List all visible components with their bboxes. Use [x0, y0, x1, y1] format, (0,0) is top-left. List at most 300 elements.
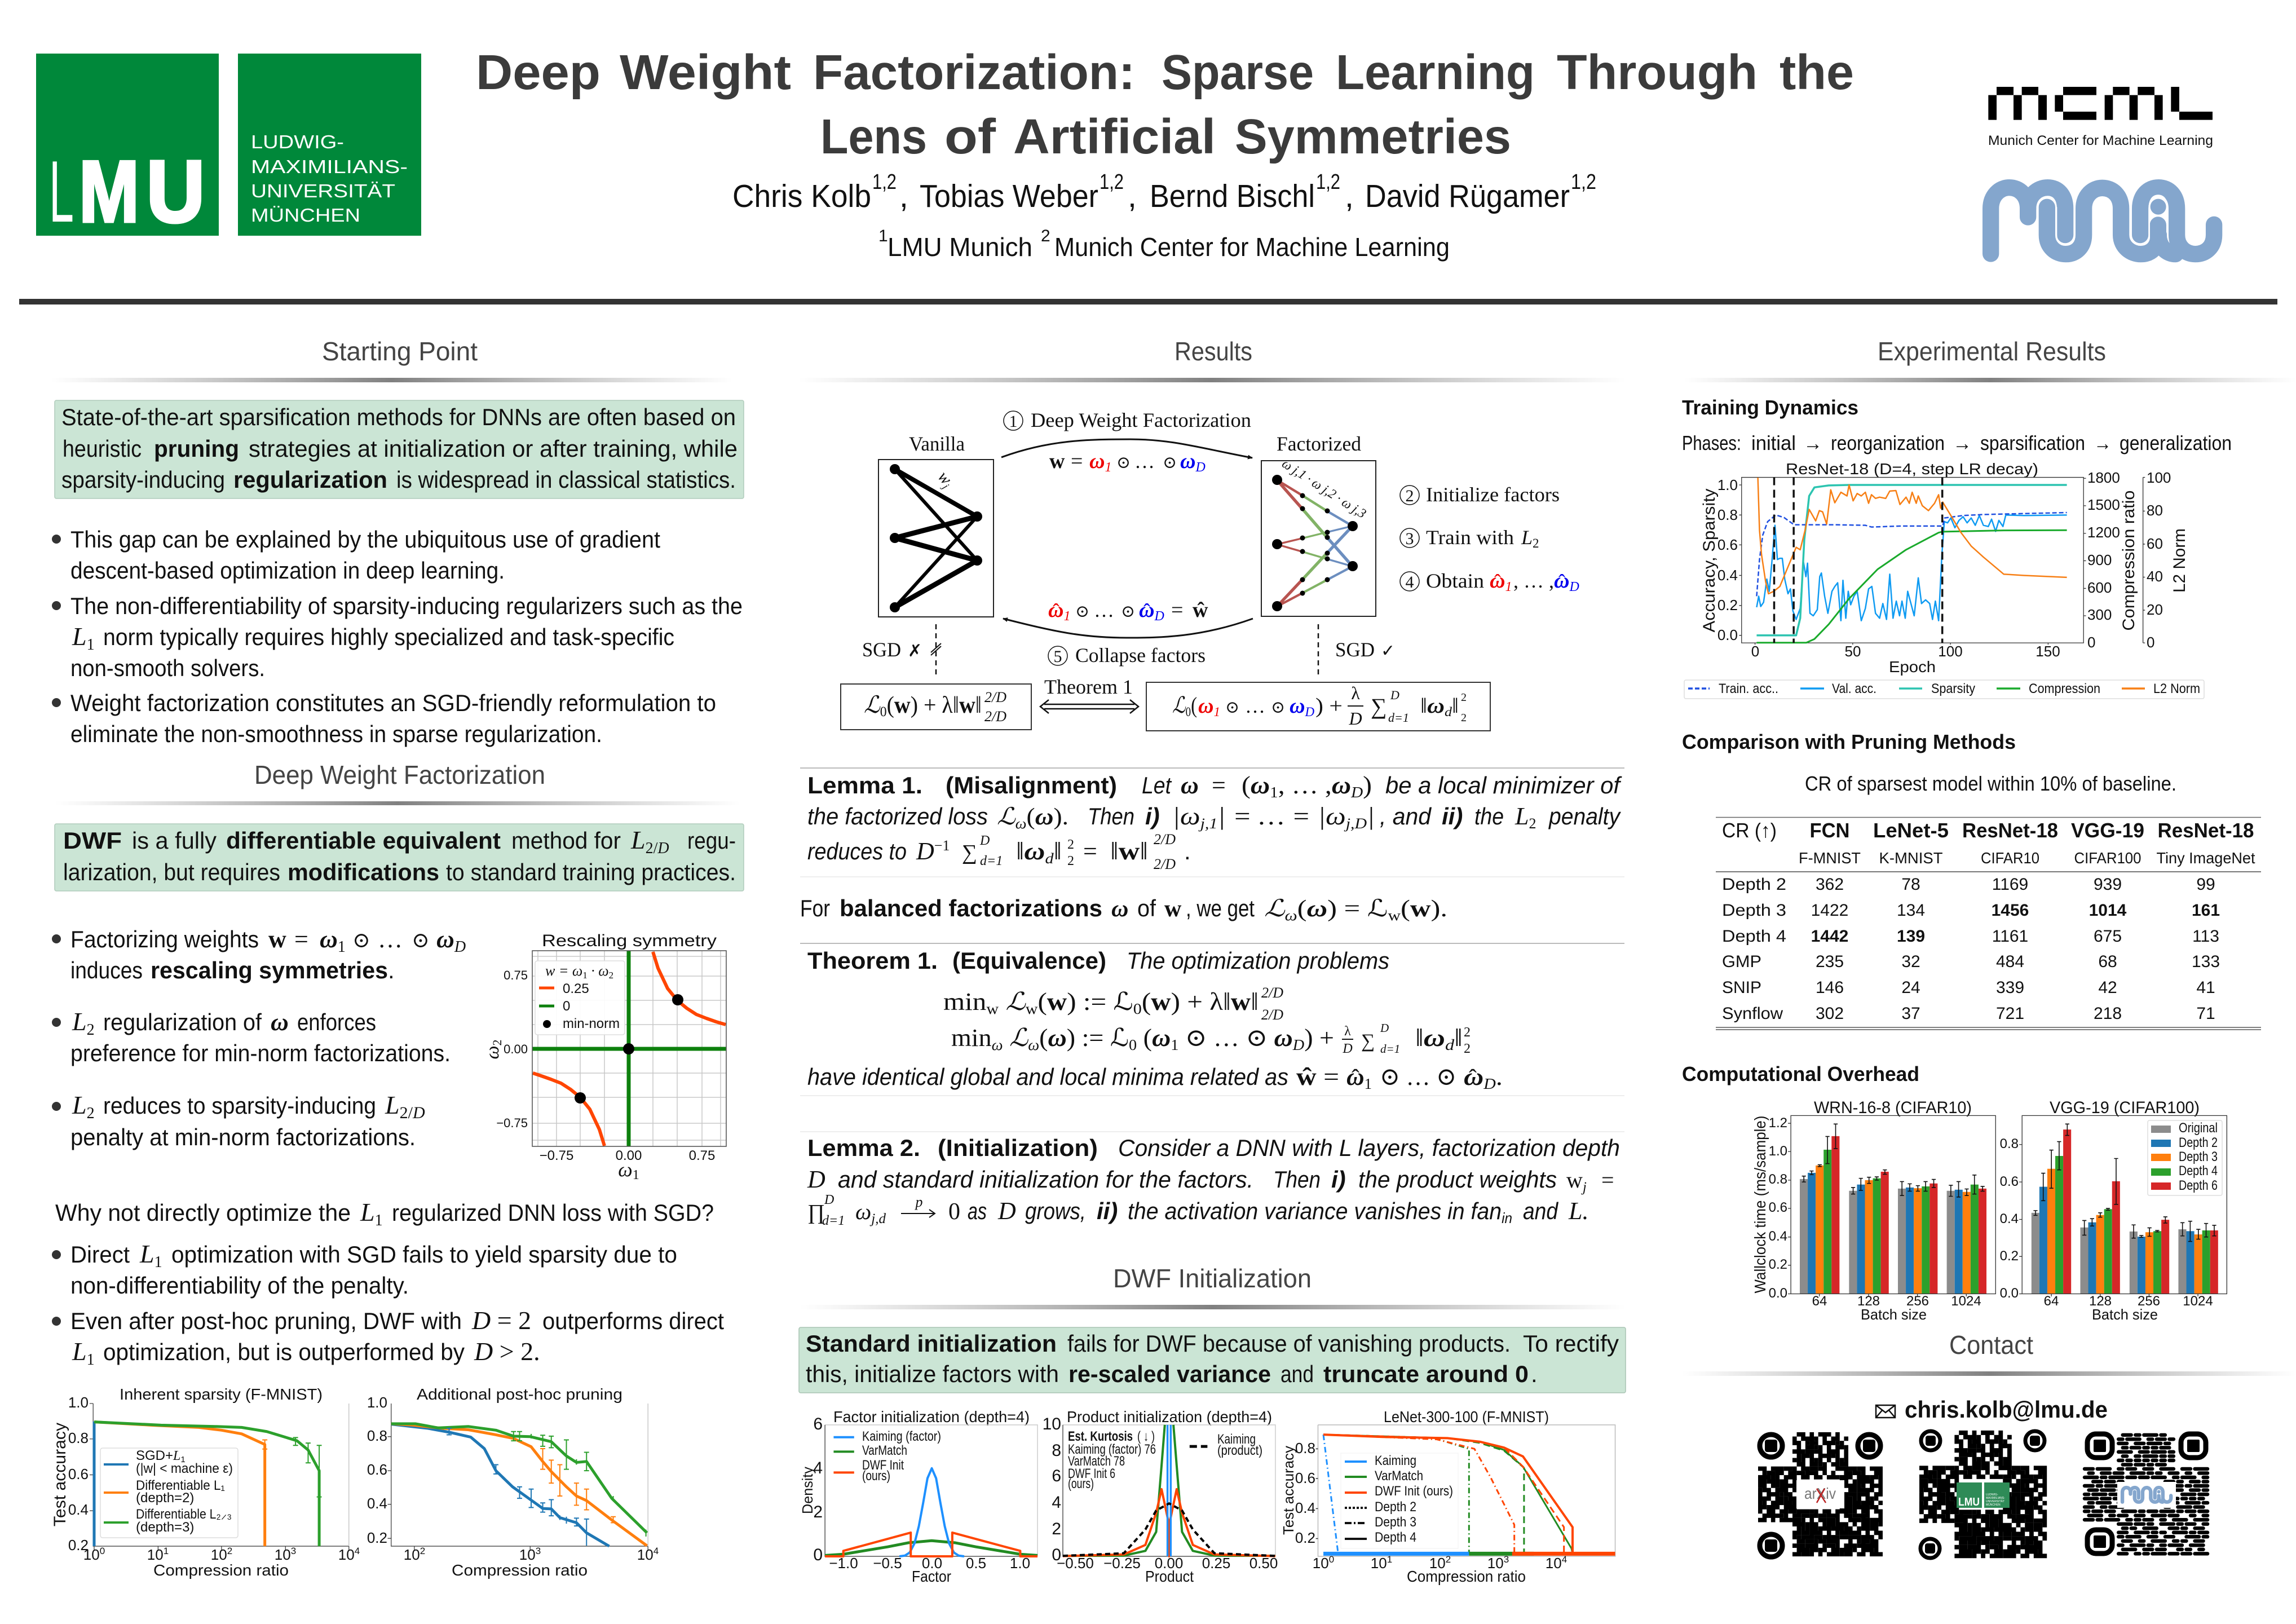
theorem 1: ( [1037, 988, 1047, 1016]
text block: balanced factorizations: ω [1284, 907, 1297, 924]
chart: VGG-19 bars: 128 [2089, 1294, 2112, 1309]
formula: collapse: … [1094, 599, 1114, 621]
lemma 1: ω [1015, 815, 1027, 832]
lemma 2: Lemma 2. [807, 1135, 920, 1161]
lemma 1: . [1184, 838, 1191, 864]
chart: additional post-hoc pruning: 0.8 [367, 1427, 387, 1444]
lemma 1: | = … = |ω [1217, 802, 1346, 830]
table: pruning comparison: CR (↑) [1722, 819, 1777, 842]
chart: training dynamics: 0.0 [1717, 626, 1738, 643]
theorem 1: 2/D [1261, 1007, 1283, 1023]
theorem 1: ⊙ … ⊙ [1380, 1063, 1456, 1091]
text: phases: sparsification [1980, 431, 2085, 454]
steps 2 to 4: D [1569, 580, 1579, 594]
lemma 1: ω [1332, 771, 1351, 799]
theorem 1: . [1496, 1063, 1503, 1091]
formula: factorization: w [1049, 449, 1065, 473]
text block: DWF bullets [52, 925, 466, 1150]
chart: additional post-hoc pruning: 0.4 [367, 1495, 387, 1512]
text block: DWF bullets: regularization of [103, 1009, 262, 1035]
callout: standard initialization: truncate around 0 [1323, 1361, 1529, 1387]
legend: Depth 3 [1375, 1515, 1416, 1530]
lemma 1: 2 [1067, 837, 1074, 852]
theorem 1: 1 [1171, 1036, 1178, 1053]
subheading: Comparison: Comparison with Pruning Methods [1682, 730, 2016, 753]
text block: why not L1: 1 [375, 1212, 383, 1229]
formula: factorization: … [1134, 450, 1155, 473]
authors: , [899, 178, 908, 214]
chart: WRN-16-8 bars: WRN-16-8 (CIFAR10) [1814, 1098, 1972, 1117]
SGD cross: SGD [862, 638, 901, 661]
lemma 1: be a local minimizer of [1385, 772, 1622, 798]
table: pruning comparison: 113 [2192, 927, 2219, 946]
chart: rescaling symmetry: 0.00 [616, 1148, 642, 1163]
callout: state of the art [55, 400, 744, 498]
lemma 1: j,1 [1198, 815, 1217, 832]
text block: balanced factorizations [800, 895, 1447, 924]
text block: why not L1 [55, 1198, 714, 1229]
chart: WRN-16-8 bars: 0.4 [1769, 1229, 1787, 1244]
chart: rescaling symmetry: 0.75 [504, 968, 528, 982]
vanilla network: w [934, 467, 956, 488]
chart: training dynamics: 600 [2087, 579, 2112, 596]
callout: standard initialization: Standard initialization [806, 1330, 1057, 1357]
lemma 2: j [1581, 1180, 1587, 1195]
legend: Depth 4 [2179, 1163, 2218, 1179]
theorem 1: 2/D [1261, 985, 1283, 1001]
chart: additional post-hoc pruning: 4 [654, 1546, 659, 1556]
table: pruning comparison: SNIP [1722, 978, 1761, 997]
chart: product initialization: 2 [1052, 1520, 1061, 1538]
theorem 1: d [1445, 1036, 1455, 1053]
chart: training dynamics: 60 [2147, 535, 2163, 552]
chart: inherent sparsity: 10 [338, 1546, 355, 1563]
table: pruning comparison: 161 [2192, 901, 2220, 920]
chart: training dynamics: 100 [1938, 643, 1963, 660]
steps 2 to 4 [1400, 483, 1579, 594]
callout: DWF [55, 824, 744, 891]
chart: training dynamics: 50 [1845, 643, 1861, 660]
QR code: LMU: MAXIMILIANS- [1986, 1497, 2005, 1500]
steps 2 to 4: ˆ [1494, 570, 1501, 593]
table: pruning comparison: 1442 [1811, 927, 1848, 946]
legend: Depth 2 [1375, 1499, 1416, 1515]
lemma 1: = [1212, 771, 1226, 799]
text block: intro bullets: This gap can be explained by the ubiquitous use of gradient [70, 526, 660, 553]
chart: training dynamics: 0 [2087, 634, 2095, 651]
legend: (|w| < machine ε) [136, 1461, 233, 1476]
lemma 2: grows, [1025, 1198, 1086, 1224]
theorem 1: ℒ [999, 988, 1026, 1016]
lemma 2: ∏ [807, 1201, 825, 1224]
chart: rescaling symmetry: 0.75 [689, 1148, 715, 1163]
chart: training dynamics: 0 [2147, 634, 2154, 651]
theorem 1: ⊙ … ⊙ [1178, 1024, 1274, 1052]
chart: rescaling symmetry: 1 [633, 1168, 639, 1182]
callout: state of the art: heuristic [63, 435, 142, 462]
formula box: L2/D objective: w) + λ‖w‖ [894, 692, 982, 718]
lemma 2: = [1601, 1167, 1614, 1193]
text block: intro bullets: non-smooth solvers. [70, 655, 265, 681]
formula box: factorized objective: 0 [1186, 705, 1191, 719]
table: pruning comparison: Depth 2 [1722, 875, 1786, 894]
theorem 1: The optimization problems [1127, 947, 1389, 974]
table: pruning comparison: F-MNIST [1799, 849, 1861, 867]
lemma 2: L. [1568, 1197, 1588, 1225]
chart: additional post-hoc pruning: 2 [420, 1546, 425, 1556]
text block: DWF bullets: ⊙ [412, 929, 430, 952]
lemma 1: ‖ω [1016, 837, 1042, 865]
legend: (depth=2) [136, 1490, 194, 1506]
chart: product initialization: 10 [1043, 1415, 1061, 1433]
chart: LeNet-300-100: 0.8 [1295, 1440, 1315, 1457]
formula box: L2/D objective: ℒ [864, 692, 881, 718]
lemma 1: i) [1145, 803, 1160, 829]
formula box: factorized objective: … [1245, 695, 1265, 717]
affiliations [878, 227, 1450, 262]
table: pruning comparison: K-MNIST [1879, 849, 1943, 867]
formula box: factorized objective: ∑ [1371, 694, 1387, 719]
chart: LeNet-300-100: 0.4 [1295, 1499, 1315, 1516]
chart: product initialization: Kaiming (factor) 76 [1068, 1442, 1156, 1457]
lemma 1: ) [1363, 771, 1372, 799]
lemma 1: d=1 [980, 854, 1003, 868]
chart: VGG-19 bars: 0.8 [2000, 1136, 2019, 1151]
step 5 label: 5 [1053, 647, 1062, 666]
contact email: chris.kolb@lmu.de [1905, 1396, 2108, 1423]
authors: 1,2 [1316, 170, 1340, 194]
callout: state of the art: sparsity-inducing [61, 466, 225, 493]
logo: MCML: Munich Center for Machine Learning [1988, 133, 2213, 148]
table: pruning comparison: 362 [1816, 875, 1844, 894]
lemma 1: |ω [1172, 802, 1196, 830]
lemma 2: Then [1273, 1166, 1321, 1193]
table: pruning comparison: 218 [2094, 1004, 2122, 1023]
lemma 1: D [979, 833, 990, 848]
table: pruning comparison: 1422 [1811, 901, 1848, 920]
table: pruning comparison: 24 [1901, 978, 1920, 997]
lemma 1: ω). [1035, 804, 1067, 830]
chart: VGG-19 bars: 0.6 [2000, 1174, 2019, 1189]
formula: collapse: ω [1139, 598, 1154, 622]
theorem 1: ω [1274, 1024, 1293, 1052]
lemma 2: p [915, 1194, 922, 1210]
text block: DWF bullets: L [72, 1007, 87, 1036]
chart: LeNet-300-100: Test accuracy [1280, 1446, 1297, 1535]
chart: additional post-hoc pruning: 10 [519, 1546, 536, 1563]
formula: collapse: ⊙ [1121, 602, 1135, 621]
theorem 1: ω [992, 1036, 1003, 1053]
text block: DWF bullets: ⊙ [352, 929, 370, 952]
text block: DWF bullets: ω [320, 925, 338, 953]
header [36, 45, 2214, 262]
logo: LMU: UNIVERSITÄT [251, 180, 395, 201]
table: pruning comparison: ResNet-18 [1962, 819, 2058, 842]
text block: DWF bullets: L [72, 1091, 87, 1119]
formula: collapse: ˆ [1053, 599, 1059, 622]
table: pruning comparison: 939 [2094, 875, 2122, 894]
chart: inherent sparsity: Compression ratio [153, 1561, 289, 1579]
formula: factorization: ⊙ [1116, 453, 1131, 472]
logo: LMU: M [79, 143, 139, 240]
formula: factorization: = [1071, 449, 1083, 473]
legend: VarMatch [1375, 1468, 1423, 1484]
table: pruning comparison: 78 [1901, 875, 1920, 894]
lemma 1: L [1515, 802, 1529, 830]
authors: , [1345, 178, 1354, 214]
formula box: factorized objective: D [1304, 705, 1314, 719]
title [476, 45, 1854, 164]
chart: additional post-hoc pruning: Compression ratio [452, 1561, 588, 1579]
chart: training dynamics: 1500 [2087, 496, 2120, 513]
theorem 1: D [1292, 1036, 1305, 1053]
table: pruning comparison: 42 [2098, 978, 2117, 997]
formula: factorization: ω [1089, 449, 1105, 473]
text block: why not L1: L [360, 1198, 375, 1226]
lemma 2: Consider a DNN with L layers, factorization depth [1118, 1135, 1620, 1161]
title: Deep [476, 45, 601, 100]
title: the [1780, 45, 1854, 100]
lemma 1: 2 [1529, 815, 1536, 832]
legend: Differentiable L₁ [136, 1478, 225, 1493]
chart: training dynamics: 40 [2147, 568, 2163, 585]
text block: L1 bullets: optimization with SGD fails to yield sparsity due to [171, 1241, 677, 1268]
chart: inherent sparsity: 10 [211, 1546, 227, 1563]
formula: collapse: 1 [1063, 609, 1070, 624]
table: pruning comparison: LeNet-5 [1873, 819, 1949, 842]
SGD check: ✓ [1381, 641, 1395, 661]
text block: balanced factorizations: w [1164, 896, 1182, 922]
lemma 1: (ω [1242, 771, 1269, 799]
theorem 1: 2 [1464, 1025, 1471, 1040]
steps 2 to 4: 2 [1405, 487, 1414, 505]
steps 2 to 4: , … , [1513, 570, 1554, 592]
title: Learning [1336, 45, 1535, 100]
steps 2 to 4: ω [1554, 569, 1569, 593]
formula box: L2/D objective: 0 [880, 704, 887, 720]
title: Artificial [1013, 109, 1216, 164]
formula box: factorized objective: λ [1351, 683, 1360, 703]
QR code: LMU: LUDWIG- [1986, 1493, 1998, 1497]
title: of [944, 109, 996, 164]
chart: additional post-hoc pruning: 0.2 [367, 1529, 387, 1546]
chart: LeNet-300-100: 4 [1562, 1554, 1567, 1565]
chart: training dynamics: 1200 [2087, 524, 2120, 541]
formula: factorization: ω [1180, 449, 1195, 473]
subheading: Computational Overhead: Computational Overhead [1682, 1062, 1919, 1085]
text block: DWF bullets: Factorizing weights [70, 926, 259, 952]
title: Factorization: [813, 45, 1135, 100]
lemma 2: and standard initialization for the factors. [838, 1166, 1253, 1193]
formula box: factorized objective: ( [1191, 692, 1197, 718]
lemma 1: ( [1027, 804, 1035, 830]
affiliations: Munich Center for Machine Learning [1054, 232, 1450, 262]
legend: Kaiming [1375, 1453, 1416, 1468]
chart: additional post-hoc pruning: Additional post-hoc pruning [417, 1385, 622, 1403]
lemma 2: d=1 [822, 1213, 845, 1228]
legend: Train. acc.. [1719, 681, 1778, 696]
table: pruning comparison: GMP [1722, 952, 1761, 971]
callout: state of the art: pruning [154, 435, 239, 462]
formula: collapse: D [1154, 609, 1164, 624]
chart: training dynamics: Epoch [1889, 658, 1936, 676]
theorem 1 [800, 943, 1624, 1096]
chart: product initialization: VarMatch 78 [1068, 1454, 1125, 1469]
legend: 2 [609, 970, 613, 981]
text block: balanced factorizations: balanced factorizations [840, 895, 1102, 921]
legend: Sparsity [1931, 681, 1975, 696]
chart: factor initialization: −0.5 [873, 1555, 902, 1572]
lemma 1: 2/D [1154, 856, 1176, 872]
diagram: deep weight factorization workflow [841, 409, 1579, 731]
QR code: LMU: LMU [1958, 1496, 1980, 1508]
lemma 1: ‖ [1054, 837, 1062, 865]
legend: Depth 2 [2179, 1135, 2218, 1150]
steps 2 to 4: L [1521, 526, 1533, 549]
callout: standard initialization: To rectify [1523, 1330, 1619, 1357]
legend: SGD+L [136, 1448, 180, 1463]
chart: training dynamics: 0.2 [1717, 597, 1738, 614]
chart: LeNet-300-100: 2 [1446, 1554, 1451, 1565]
chart: LeNet-300-100: 10 [1546, 1555, 1562, 1572]
chart: rescaling symmetry [482, 932, 726, 1182]
lemma 2: ω [855, 1199, 871, 1224]
chart: rescaling symmetry: −0.75 [540, 1148, 573, 1163]
callout: DWF: differentiable equivalent [226, 827, 501, 854]
chart: product initialization: (ours) [1068, 1476, 1094, 1491]
callout: DWF: method for [511, 827, 621, 854]
legend: Compression [2029, 681, 2100, 696]
QR code: LMU: MÜNCHEN [1986, 1503, 2001, 1507]
chart: training dynamics [1684, 460, 2204, 699]
lemma 2: j,d [869, 1211, 886, 1226]
chart: factor initialization: Factor initialization (depth=4) [833, 1408, 1030, 1426]
chart: inherent sparsity: 0 [100, 1546, 105, 1556]
chart: factor initialization: 1.0 [1010, 1555, 1030, 1572]
lemma 1: ω [1181, 771, 1199, 799]
text block: intro bullets: L [72, 622, 87, 651]
chart: VGG-19 bars: 0.4 [2000, 1211, 2019, 1226]
theorem 1: ( [1142, 988, 1151, 1016]
chart: factor initialization: 2 [813, 1503, 823, 1521]
formula box: factorized objective: 2 [1461, 712, 1467, 724]
chart: additional post-hoc pruning: 3 [536, 1546, 541, 1556]
chart: inherent sparsity: 2 [227, 1546, 232, 1556]
factorized network: Factorized [1277, 433, 1361, 455]
steps 2 to 4: ˆ [1558, 570, 1565, 593]
steps 2 to 4: 3 [1405, 529, 1414, 548]
table: pruning comparison: 68 [2098, 952, 2117, 971]
chart: VGG-19 bars: 0.2 [2000, 1248, 2019, 1264]
legend: 0 [563, 999, 570, 1014]
table: pruning comparison: FCN [1810, 819, 1849, 842]
legend: 1 [582, 970, 588, 981]
chart: product initialization: 0.50 [1249, 1555, 1278, 1572]
table: pruning comparison: VGG-19 [2071, 819, 2144, 842]
formula box: factorized objective: ‖ [1452, 694, 1459, 718]
legend [100, 1448, 238, 1538]
lemma 2: ii) [1097, 1198, 1118, 1224]
QR code: arXiv: arXiv [1804, 1485, 1836, 1502]
text block: balanced factorizations: of [1137, 895, 1156, 921]
lemma 1: , and [1380, 803, 1432, 829]
theorem 1: D [1342, 1042, 1353, 1056]
equivalence arrow [1040, 676, 1138, 713]
text block: DWF bullets: ω [436, 925, 454, 953]
chart: VGG-19 bars: VGG-19 (CIFAR100) [2050, 1098, 2200, 1117]
text block: DWF bullets: D [454, 938, 466, 956]
chart: training dynamics: 1.0 [1717, 476, 1738, 493]
chart: product initialization: Est. Kurtosis [1068, 1429, 1133, 1444]
chart: factor initialization: VarMatch [862, 1443, 907, 1458]
lemma 1: penalty [1548, 803, 1622, 829]
chart: product initialization: −0.25 [1103, 1555, 1141, 1572]
text block: DWF bullets: 1 [338, 938, 346, 956]
theorem 1: w [1026, 1000, 1038, 1017]
logo: MCML [1988, 87, 2213, 148]
chart: VGG-19 bars: 256 [2138, 1294, 2160, 1309]
authors [732, 170, 1596, 214]
lemma 2: as [968, 1198, 987, 1224]
chart: training dynamics: 900 [2087, 551, 2112, 568]
equivalence arrow: Theorem 1 [1044, 676, 1133, 698]
table: pruning comparison: Depth 3 [1722, 901, 1786, 920]
chart: factor initialization [799, 1408, 1037, 1585]
heading: Experimental Results: Experimental Results [1878, 337, 2106, 366]
text block: L1 bullets: D > 2. [474, 1337, 540, 1366]
legend [2148, 1120, 2222, 1195]
text block: DWF bullets: = [294, 925, 308, 953]
theorem 1: ω [1464, 1063, 1483, 1091]
chart: training dynamics: L2 Norm [2170, 528, 2189, 593]
chart: product initialization: Product [1145, 1568, 1194, 1585]
lemma 1: (Misalignment) [946, 772, 1117, 798]
legend: w = ω [545, 963, 582, 979]
text block: L1 bullets [52, 1239, 724, 1369]
vanilla network: Vanilla [909, 433, 965, 455]
theorem 1: have identical global and local minima related as [807, 1063, 1288, 1090]
chart: product initialization: −0.50 [1057, 1555, 1094, 1572]
formula: collapse: ŵ [1193, 598, 1208, 622]
table: pruning comparison: 99 [2196, 875, 2215, 894]
text block: intro bullets: 1 [87, 636, 95, 654]
chart: inherent sparsity: 0.8 [68, 1429, 89, 1446]
text block: DWF bullets: L [385, 1091, 400, 1119]
text: phases: → [1803, 432, 1822, 454]
lemma 1: , … , [1278, 771, 1332, 799]
chart: LeNet-300-100: 10 [1429, 1555, 1446, 1572]
chart: training dynamics: 0.6 [1717, 536, 1738, 553]
callout: standard initialization: fails for DWF because of vanishing products. [1067, 1330, 1511, 1357]
chart: WRN-16-8 bars: 64 [1812, 1294, 1827, 1309]
lemma 1: 1 [1270, 784, 1278, 801]
text block: L1 bullets: non-differentiability of the penalty. [70, 1272, 409, 1299]
text block: DWF bullets: 2/ [400, 1104, 413, 1122]
text block: balanced factorizations: ( [1297, 896, 1306, 922]
table: pruning comparison: 1169 [1992, 875, 2028, 894]
title: Weight [620, 45, 791, 100]
table: pruning comparison: 721 [1996, 1004, 2024, 1023]
text block: L1 bullets: L [72, 1337, 87, 1366]
legend: Original [2179, 1120, 2218, 1136]
arrow: collapse [1003, 619, 1253, 638]
QR code: LMU: UNIVERSITÄT [1986, 1499, 2004, 1503]
text block: DWF bullets: preference for min-norm factorizations. [70, 1040, 451, 1066]
table: pruning comparison: 484 [1996, 952, 2024, 971]
vanilla network: j [939, 480, 951, 492]
chart: inherent sparsity: 1.0 [68, 1394, 89, 1411]
formula: collapse [1048, 598, 1208, 624]
